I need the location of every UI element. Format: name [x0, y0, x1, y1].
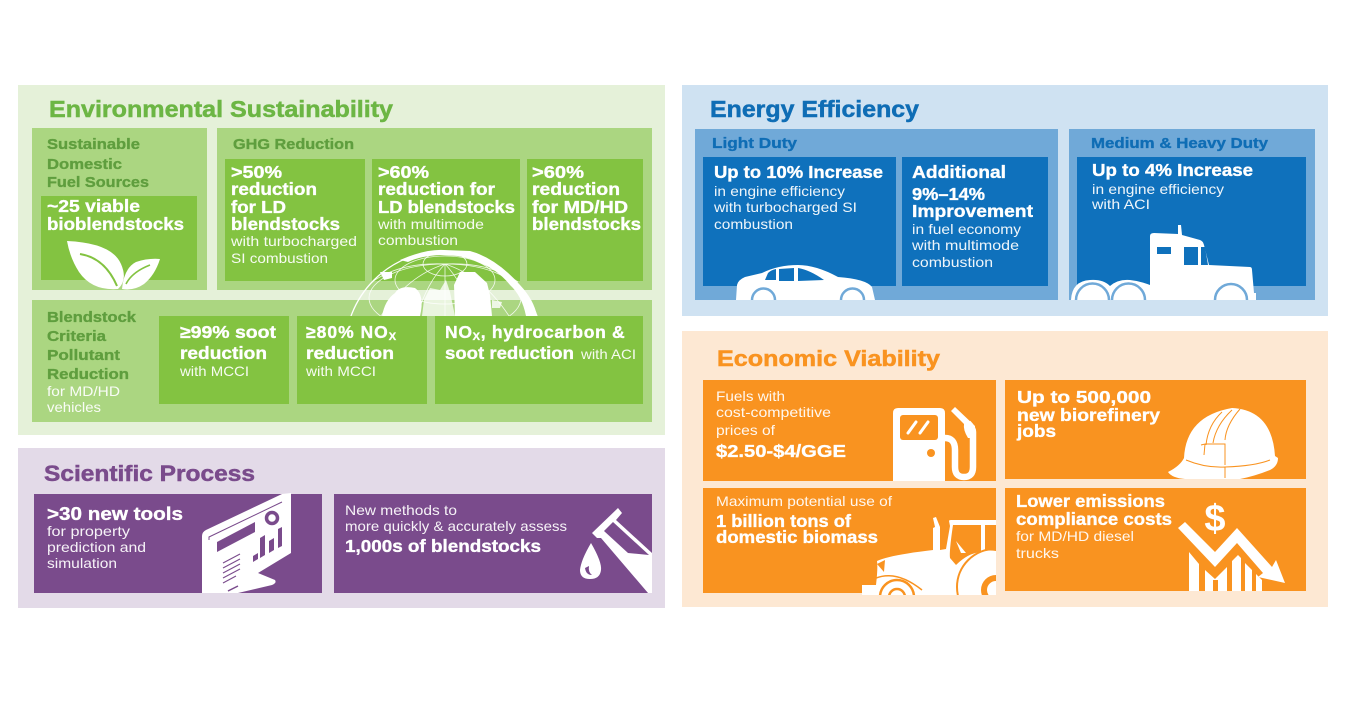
icon: test tube and drop	[580, 508, 652, 593]
subheading: blendstock criteria pollutant reduction: Blendstock	[47, 309, 137, 326]
icon: globe	[350, 250, 538, 316]
card: over 60 percent MD/HD: blendstocks	[532, 214, 641, 234]
subheading: sustainable domestic fuel sources: Sustainable	[47, 136, 140, 153]
subheading: sustainable domestic fuel sources: Domestic	[47, 156, 122, 173]
panel: environmental sustainability	[18, 85, 665, 449]
subheading: blendstock criteria pollutant reduction: Reduction	[47, 366, 129, 383]
card: over 50 percent LD: with turbocharged	[230, 233, 357, 249]
heading: scientific process: Scientific Process	[44, 461, 255, 486]
card: biorefinery jobs: jobs	[1016, 421, 1056, 441]
heading: energy efficiency: Energy Efficiency	[710, 96, 919, 122]
card: NOx hydrocarbon soot reduction: with ACI	[580, 346, 636, 362]
subheading: GHG reduction: GHG Reduction	[233, 136, 354, 153]
card: over 60 percent LD: with multimode	[377, 216, 484, 232]
icon: computer monitor	[202, 493, 291, 593]
card: up to 4 percent increase	[1077, 157, 1306, 286]
card: over 60 percent MD/HD: >60%	[532, 162, 584, 182]
panel: medium and heavy duty	[1069, 129, 1315, 300]
card: NOx hydrocarbon soot reduction: soot reduction	[445, 343, 574, 363]
subheading: medium and heavy duty: Medium & Heavy Duty	[1091, 135, 1269, 152]
card: soot reduction: ≥99% soot	[180, 322, 276, 342]
card: additional improvement	[902, 157, 1048, 286]
subheading: sustainable domestic fuel sources	[47, 136, 149, 191]
heading: environmental sustainability: Environmental Sustainability	[49, 96, 393, 122]
panel: sustainable domestic fuel sources	[32, 128, 207, 290]
card: over 60 percent MD/HD: for MD/HD	[532, 197, 628, 217]
card: lower compliance costs: compliance costs	[1016, 509, 1172, 529]
card: additional improvement: Improvement	[912, 201, 1033, 221]
panel: blendstock criteria pollutant reduction	[32, 300, 652, 422]
card: lower compliance costs: trucks	[1016, 545, 1059, 561]
card: NOx hydrocarbon soot reduction: , hydrocarbon &	[481, 322, 625, 342]
subheading: blendstock criteria pollutant reduction: for MD/HD	[47, 383, 120, 399]
card: up to 4 percent increase: in engine efficiency	[1092, 181, 1224, 197]
card: billion tons biomass: 1 billion tons of	[716, 511, 851, 531]
card: new methods	[334, 494, 652, 593]
card: new tools: simulation	[47, 555, 117, 571]
card: over 60 percent LD	[372, 159, 520, 281]
card: soot reduction	[159, 316, 289, 404]
card: over 60 percent LD: LD blendstocks	[378, 197, 515, 217]
card: fuel prices	[703, 380, 996, 481]
card: NOx hydrocarbon soot reduction: NO	[445, 322, 473, 342]
card: new methods: more quickly & accurately assess	[345, 518, 567, 534]
icon: falling costs: $	[1204, 498, 1226, 540]
card: NOx reduction: reduction	[306, 343, 394, 363]
card: over 50 percent LD: for LD	[231, 197, 286, 217]
card: biorefinery jobs	[1005, 380, 1306, 479]
subheading: sustainable domestic fuel sources: Fuel Sources	[47, 174, 149, 191]
card: NOx reduction	[297, 316, 427, 404]
icon: hard hat	[1168, 408, 1278, 479]
icon: truck	[1071, 225, 1256, 300]
icon: falling costs	[1178, 498, 1285, 592]
panel: economic viability	[682, 331, 1328, 625]
card: biorefinery jobs: new biorefinery	[1017, 405, 1160, 425]
stat: viable bioblendstocks	[47, 196, 184, 234]
card: up to 10 percent increase: Up to 10% Increase	[714, 162, 883, 182]
card: over 60 percent LD: >60%	[378, 162, 429, 182]
subheading: blendstock criteria pollutant reduction: vehicles	[47, 399, 101, 415]
stat: viable bioblendstocks: ~25 viable	[47, 196, 140, 216]
card: up to 10 percent increase	[703, 157, 896, 286]
card: soot reduction: reduction	[180, 343, 267, 363]
card: lower compliance costs: Lower emissions	[1016, 491, 1165, 511]
card: soot reduction: with MCCI	[179, 363, 249, 379]
panel: scientific process	[18, 448, 665, 608]
card: over 60 percent MD/HD: reduction	[532, 179, 620, 199]
card: fuel prices: Fuels with	[716, 388, 785, 404]
card: over 50 percent LD: >50%	[231, 162, 282, 182]
subheading: blendstock criteria pollutant reduction	[47, 309, 137, 415]
panel: energy efficiency	[682, 85, 1328, 316]
card: up to 4 percent increase: with ACI	[1091, 196, 1150, 212]
card: NOx reduction: with MCCI	[305, 363, 376, 379]
card: new tools: >30 new tools	[47, 503, 183, 524]
card: lower compliance costs	[1005, 488, 1306, 592]
icon: car	[736, 265, 875, 300]
card: NOx hydrocarbon soot reduction: X	[473, 331, 481, 343]
card: up to 10 percent increase: in engine efficiency	[714, 183, 845, 199]
panel: GHG reduction	[217, 128, 652, 290]
card: over 50 percent LD: blendstocks	[231, 214, 340, 234]
card: biorefinery jobs: Up to 500,000	[1017, 387, 1151, 407]
panel: light duty	[695, 129, 1058, 300]
card: over 50 percent LD: SI combustion	[231, 250, 328, 266]
card: over 60 percent LD: combustion	[378, 232, 458, 248]
card: up to 10 percent increase: with turbocharged SI	[713, 199, 857, 215]
card: over 60 percent MD/HD	[527, 159, 643, 281]
card: additional improvement: combustion	[912, 254, 993, 270]
card: additional improvement: Additional	[912, 162, 1006, 182]
card: fuel prices: prices of	[716, 422, 775, 438]
card: billion tons biomass	[703, 488, 996, 595]
card: up to 4 percent increase: Up to 4% Increase	[1092, 160, 1253, 180]
card: fuel prices: $2.50-$4/GGE	[716, 441, 846, 461]
card: over 50 percent LD	[225, 159, 365, 281]
card: lower compliance costs: for MD/HD diesel	[1016, 528, 1134, 544]
card: billion tons biomass: domestic biomass	[716, 527, 878, 547]
card: up to 10 percent increase: combustion	[714, 216, 793, 232]
card: additional improvement: 9%–14%	[912, 184, 985, 204]
card: additional improvement: with multimode	[911, 237, 1019, 253]
card: additional improvement: in fuel economy	[912, 221, 1021, 237]
heading: economic viability: Economic Viability	[717, 346, 941, 371]
card: fuel prices: cost-competitive	[716, 404, 831, 420]
icon: fuel pump	[893, 407, 975, 481]
subheading: light duty: Light Duty	[712, 135, 798, 152]
card: NOx reduction: ≥80% NO	[306, 322, 389, 342]
card: over 50 percent LD: reduction	[231, 179, 317, 199]
stat: viable bioblendstocks: bioblendstocks	[47, 214, 184, 234]
card: new methods: 1,000s of blendstocks	[345, 536, 541, 556]
card: new tools	[34, 493, 322, 593]
card: billion tons biomass: Maximum potential use of	[716, 493, 892, 509]
card: new tools: prediction and	[47, 539, 146, 555]
icon: tractor	[862, 517, 996, 595]
card: over 60 percent LD: reduction for	[378, 179, 495, 199]
subheading: blendstock criteria pollutant reduction: Criteria	[47, 328, 107, 345]
card: NOx reduction: X	[389, 331, 397, 343]
card: NOx hydrocarbon soot reduction	[435, 316, 643, 404]
subheading: blendstock criteria pollutant reduction: Pollutant	[47, 347, 120, 364]
icon: leaves	[67, 241, 160, 289]
card: new methods: New methods to	[345, 502, 457, 518]
card: new tools: for property	[47, 523, 130, 539]
